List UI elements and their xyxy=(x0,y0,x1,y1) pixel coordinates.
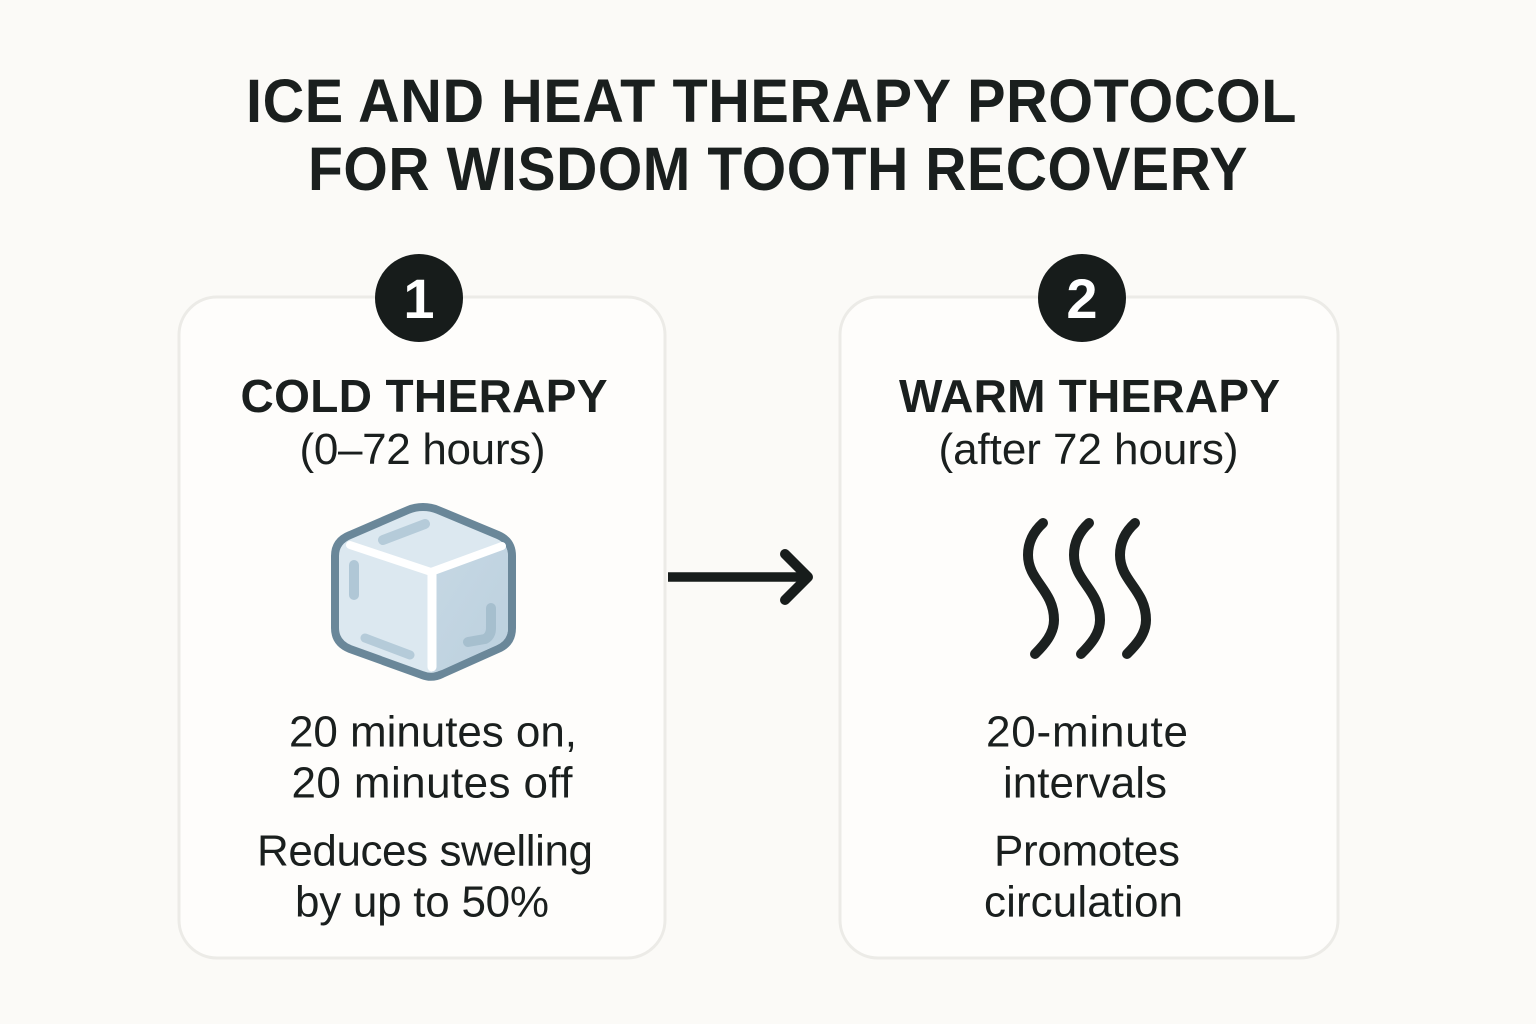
panel card: cold xyxy=(179,297,665,958)
benefit: cold xyxy=(257,826,593,926)
duration: cold xyxy=(289,708,577,808)
benefit: warm: Promotes xyxy=(994,826,1180,876)
benefit: warm: circulation xyxy=(984,878,1183,926)
duration: warm: 20-minute xyxy=(986,708,1188,756)
step badge 2: 2 xyxy=(1066,267,1098,330)
icon: ice cube xyxy=(335,507,512,677)
duration: warm: intervals xyxy=(1003,758,1167,808)
duration: cold: 20 minutes off xyxy=(292,758,573,808)
heading: warm therapy: WARM THERAPY xyxy=(899,370,1280,422)
icon: heat waves xyxy=(1028,523,1146,654)
benefit: cold: by up to 50% xyxy=(295,878,549,926)
title xyxy=(246,67,1297,203)
duration: cold: 20 minutes on, xyxy=(289,708,577,756)
panel: warm therapy xyxy=(840,254,1338,958)
step badge 1: 1 xyxy=(403,267,435,330)
benefit: cold: Reduces swelling xyxy=(257,826,593,876)
time window: warm: (after 72 hours) xyxy=(938,425,1238,474)
step badge 2 xyxy=(1038,254,1126,342)
arrow: cold to warm xyxy=(668,554,808,600)
duration: warm xyxy=(986,708,1188,808)
panel: cold therapy xyxy=(179,254,665,958)
step badge 1 xyxy=(375,254,463,342)
time window: cold: (0–72 hours) xyxy=(300,425,546,474)
heading: cold therapy: COLD THERAPY xyxy=(240,370,608,422)
benefit: warm xyxy=(984,826,1183,926)
panel card: warm xyxy=(840,297,1338,958)
title: FOR WISDOM TOOTH RECOVERY xyxy=(308,135,1248,203)
title: ICE AND HEAT THERAPY PROTOCOL xyxy=(246,67,1297,135)
